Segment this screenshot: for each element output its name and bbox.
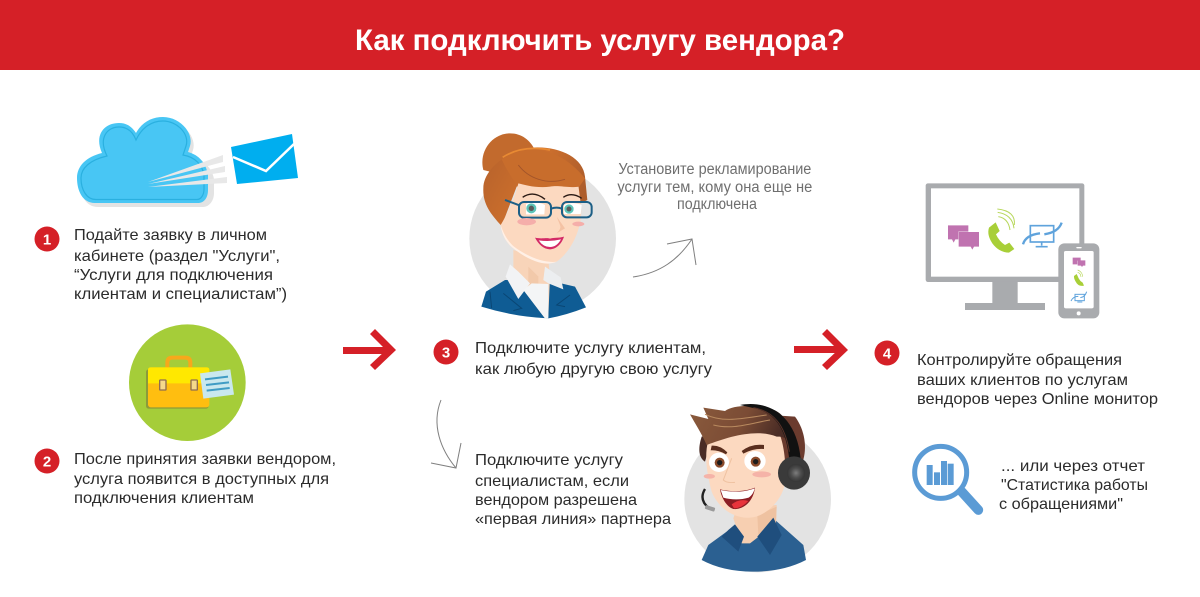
shirt [702,518,806,572]
hair back [699,433,713,462]
collar [722,524,744,552]
chat bubbles [948,225,979,250]
badge 3: 3 [442,344,450,362]
arrow: curved down to specialists [431,400,461,468]
ear cup [778,456,810,490]
step 4 [874,340,1158,408]
step 3 text: Подключите услугу клиентам, [475,340,706,357]
badge 1: 1 [43,232,51,248]
callout: advertising note: подключена [677,196,757,213]
icon: magnifier with bars [915,446,978,510]
badge 1 [34,226,60,252]
arrow: to step 3 [343,329,396,370]
report text: ... или через отчет [1001,458,1146,475]
badge 2: 2 [43,454,51,470]
icon: cloud with envelope [77,117,298,207]
step 4 text: вендоров через Online монитор [917,391,1158,408]
jacket [481,280,586,318]
step 3 [434,340,712,378]
icon: monitor and phone [926,183,1099,318]
face [706,428,785,518]
neck [733,505,777,543]
nose and cheeks [723,458,735,483]
headband [740,404,801,460]
step 2 text: После принятия заявки вендором, [74,451,336,468]
illustration: man with headset [684,404,831,572]
step 4 text: ваших клиентов по услугам [917,372,1128,389]
callout: advertising note: услуги тем, кому она еще не [617,179,812,196]
badge 3 [434,340,458,364]
step 1 text: кабинете (раздел "Услуги", [74,248,280,265]
face [501,180,581,264]
step 1 text: “Услуги для подключения [74,267,273,284]
eyes [709,453,729,472]
step 2 text: услуга появится в доступных для [74,471,329,488]
monitor [926,183,1084,310]
title: Как подключить услугу вендора? [355,24,845,57]
collar [506,264,530,299]
step 2 [34,448,340,507]
eyes [526,202,545,214]
hair back [482,133,535,177]
badge 4: 4 [883,346,892,362]
header banner [0,0,1200,70]
specialists text: специалистам, если [475,473,629,490]
badge 2 [34,448,60,474]
glasses [519,202,592,218]
icon: briefcase on green circle [129,324,246,441]
report text: "Статистика работы [1001,477,1148,494]
lips [535,237,564,249]
badge 4 [874,340,900,366]
illustration: woman with glasses [469,133,616,318]
screen with arrows [1023,223,1062,247]
specialists text: «первая линия» партнера [475,511,671,528]
smartphone [1058,243,1099,318]
specialists text: Подключите услугу [475,452,623,469]
callout: advertising note: Установите рекламирование [618,161,811,178]
step 1 text: Подайте заявку в личном [74,227,267,244]
step 1 [34,226,287,303]
hair fringe [502,150,585,187]
phone handset with signal [988,209,1014,253]
specialists text: вендором разрешена [475,492,637,509]
report text: с обращениями" [999,496,1123,513]
step 1 text: клиентам и специалистам”) [74,286,287,303]
mouth [720,488,755,509]
neck [513,250,550,318]
step 3 text: как любую другую свою услугу [475,361,712,378]
cheeks [517,218,536,225]
step 4 text: Контролируйте обращения [917,352,1122,369]
microphone [702,489,709,508]
arrow: curved up to note [633,239,696,277]
hair [690,406,788,445]
arrow: to step 4 [794,329,848,370]
step 2 text: подключения клиентам [74,490,254,507]
